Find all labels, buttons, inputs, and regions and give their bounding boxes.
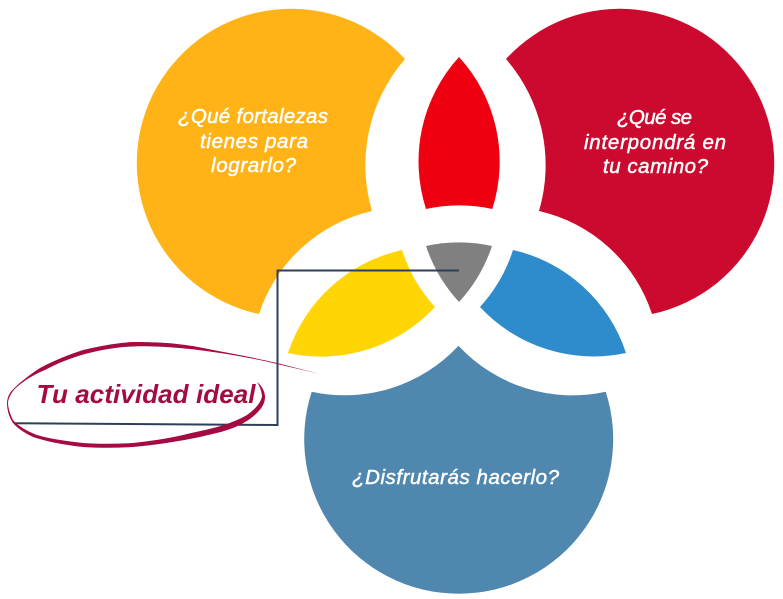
callout: hand-drawn ellipse with label: Tu actividad ideal — [36, 379, 256, 409]
panel: blue-grey circle, enjoyment: ¿Disfrutarás hacerlo? — [352, 466, 560, 489]
blue overlap petal — [480, 250, 626, 356]
panel: orange circle, strengths: lograrlo? — [211, 154, 297, 177]
panel: red circle, obstacles: interpondrá en — [584, 131, 726, 154]
panel: red circle, obstacles: ¿Qué se — [617, 106, 692, 129]
grey centre petal — [426, 242, 492, 302]
panel: red circle, obstacles — [506, 9, 774, 314]
panel: orange circle, strengths — [137, 9, 405, 314]
panel: orange circle, strengths: tienes para — [200, 130, 308, 153]
panel: blue-grey circle, enjoyment — [304, 346, 613, 594]
yellow overlap petal — [288, 250, 435, 357]
connector line from centre to label — [15, 270, 459, 425]
red overlap petal — [419, 57, 500, 209]
panel: red circle, obstacles: tu camino? — [603, 155, 709, 178]
panel: orange circle, strengths: ¿Qué fortalezas — [178, 105, 328, 128]
callout: hand-drawn ellipse with label — [7, 342, 320, 448]
